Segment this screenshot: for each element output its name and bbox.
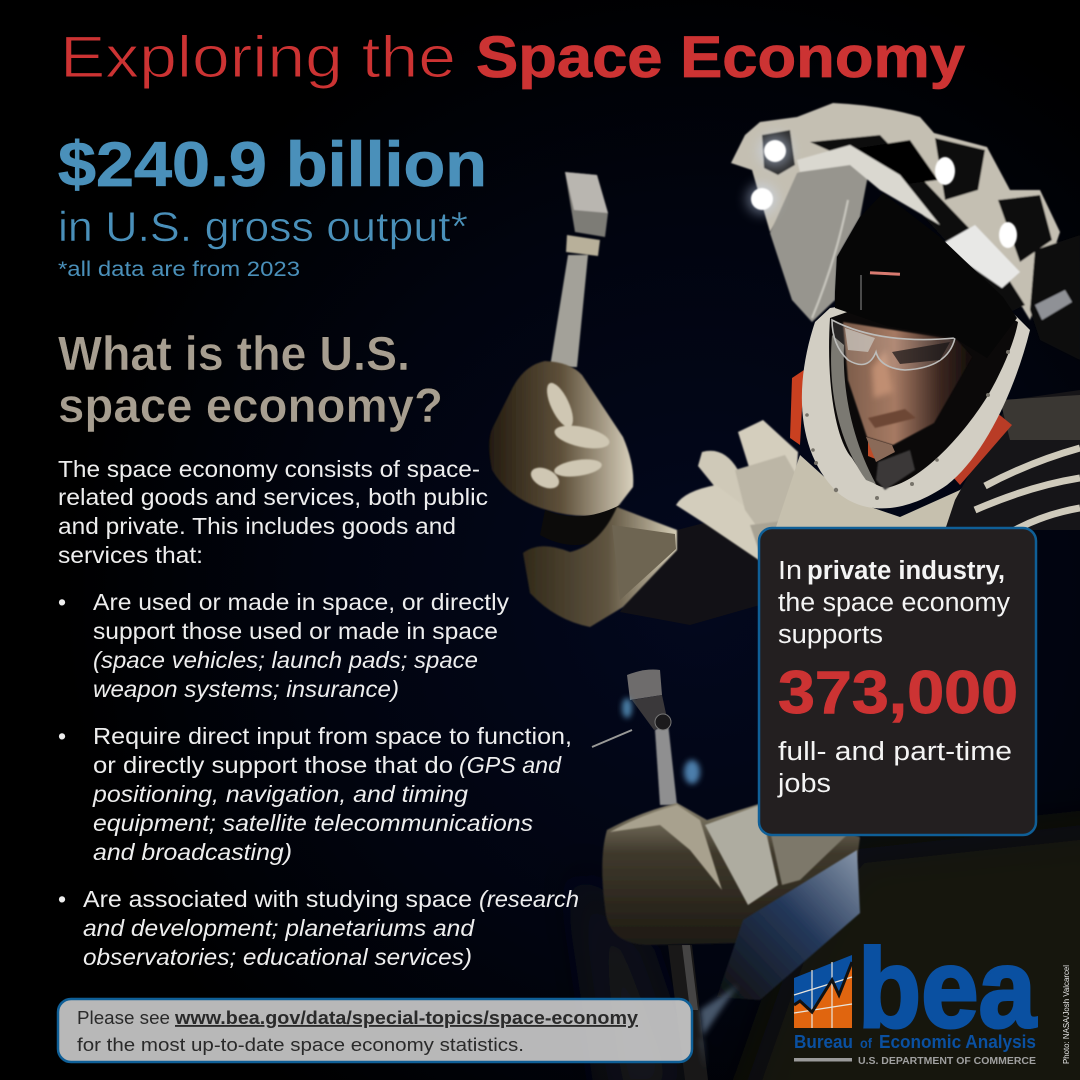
suit leg highlight (700, 985, 738, 1070)
icon: rising chart (794, 955, 852, 1028)
bullet 1: support those used or made in space (93, 618, 498, 644)
gross output statistic: *all data are from 2023 (58, 258, 300, 281)
bullet 2: or directly support those that do (93, 752, 453, 778)
heading: what is the space economy (58, 328, 443, 433)
callout: website note: Please see (77, 1007, 170, 1028)
knit hat (835, 193, 1017, 358)
gross output statistic: in U.S. gross output* (58, 203, 468, 250)
visor inner lining (831, 335, 876, 484)
panel: private industry jobs: private industry, (807, 557, 1005, 585)
bullet 1: Are used or made in space, or directly (93, 589, 510, 615)
bureau name (794, 1031, 1036, 1052)
wordmark: bea (858, 926, 1037, 1051)
panel: private industry jobs: the space economy (778, 589, 1010, 617)
tool: raised hammer (550, 172, 608, 367)
helmet collar ring (802, 300, 1030, 508)
heading: what is the space economy: What is the U.S. (58, 328, 410, 381)
bullet 2: and broadcasting) (93, 839, 292, 865)
photo credit: Photo: NASA/Josh Valcarcel (1061, 965, 1071, 1064)
bullet 2: equipment; satellite telecommunications (93, 810, 534, 836)
bullet 2: Require direct input from space to function, (93, 723, 572, 749)
bureau name: of (860, 1035, 872, 1051)
panel: private industry jobs: In (778, 557, 802, 585)
logo: Bureau of Economic Analysis (794, 926, 1037, 1067)
title: Exploring the (60, 25, 456, 90)
callout: website note: www.bea.gov/data/special-topics/space-economy (174, 1007, 639, 1028)
panel: private industry jobs: jobs (777, 770, 831, 798)
bullet 1: • (58, 589, 66, 615)
bullet 3: Are associated with studying space (83, 886, 472, 912)
department line: U.S. DEPARTMENT OF COMMERCE (858, 1055, 1036, 1067)
bullet 2: • (58, 723, 66, 749)
panel: private industry jobs: supports (778, 621, 883, 649)
bullet 3 (58, 886, 579, 970)
title: Space Economy (476, 25, 965, 90)
tablet (717, 850, 860, 1000)
bullet 2 (58, 723, 572, 865)
bullet 1 (58, 589, 510, 702)
bullet 3: and development; planetariums and (83, 915, 475, 941)
bullet 2: positioning, navigation, and timing (92, 781, 468, 807)
shoulder straps (676, 420, 808, 565)
heading: what is the space economy: space economy? (58, 380, 443, 433)
panel: private industry jobs (759, 528, 1036, 835)
panel: private industry jobs: full- and part-time (778, 738, 1012, 766)
helmet shell (731, 103, 1080, 360)
intro paragraph: and private. This includes goods and (58, 513, 456, 539)
lower tool (592, 670, 708, 1080)
helmet lamps (747, 135, 1017, 248)
gross output statistic: $240.9 billion (58, 130, 487, 200)
intro paragraph: related goods and services, both public (58, 484, 488, 510)
callout: website note (58, 999, 692, 1062)
face opening (829, 280, 1018, 488)
bullet 3: • (58, 886, 66, 912)
bureau name: Bureau (794, 1031, 853, 1052)
intro paragraph (58, 456, 488, 568)
glasses (832, 320, 955, 370)
gross output statistic (58, 130, 487, 281)
bullet 1: (space vehicles; launch pads; space (93, 647, 478, 673)
bullet 1: weapon systems; insurance) (93, 676, 399, 702)
title (60, 25, 965, 90)
bureau name: Economic Analysis (879, 1031, 1036, 1052)
glove: raised hand (489, 361, 677, 627)
panel: private industry jobs: 373,000 (778, 659, 1018, 726)
red pads (790, 370, 1012, 485)
torso suit (775, 390, 1080, 530)
intro paragraph: The space economy consists of space- (58, 456, 480, 482)
bullet 3: observatories; educational services) (83, 944, 472, 970)
face (832, 320, 972, 490)
callout: website note: for the most up-to-date space economy statistics. (77, 1034, 524, 1055)
intro paragraph: services that: (58, 542, 203, 568)
photo: astronaut in spacesuit (489, 103, 1080, 1080)
bullet 2: (GPS and (459, 752, 562, 778)
glove: lower hand (602, 803, 860, 945)
arm: upper dark sleeve (620, 515, 760, 625)
lower body shadows (575, 820, 1080, 1080)
bullet 3: (research (479, 886, 579, 912)
collar bolts (805, 350, 1010, 500)
